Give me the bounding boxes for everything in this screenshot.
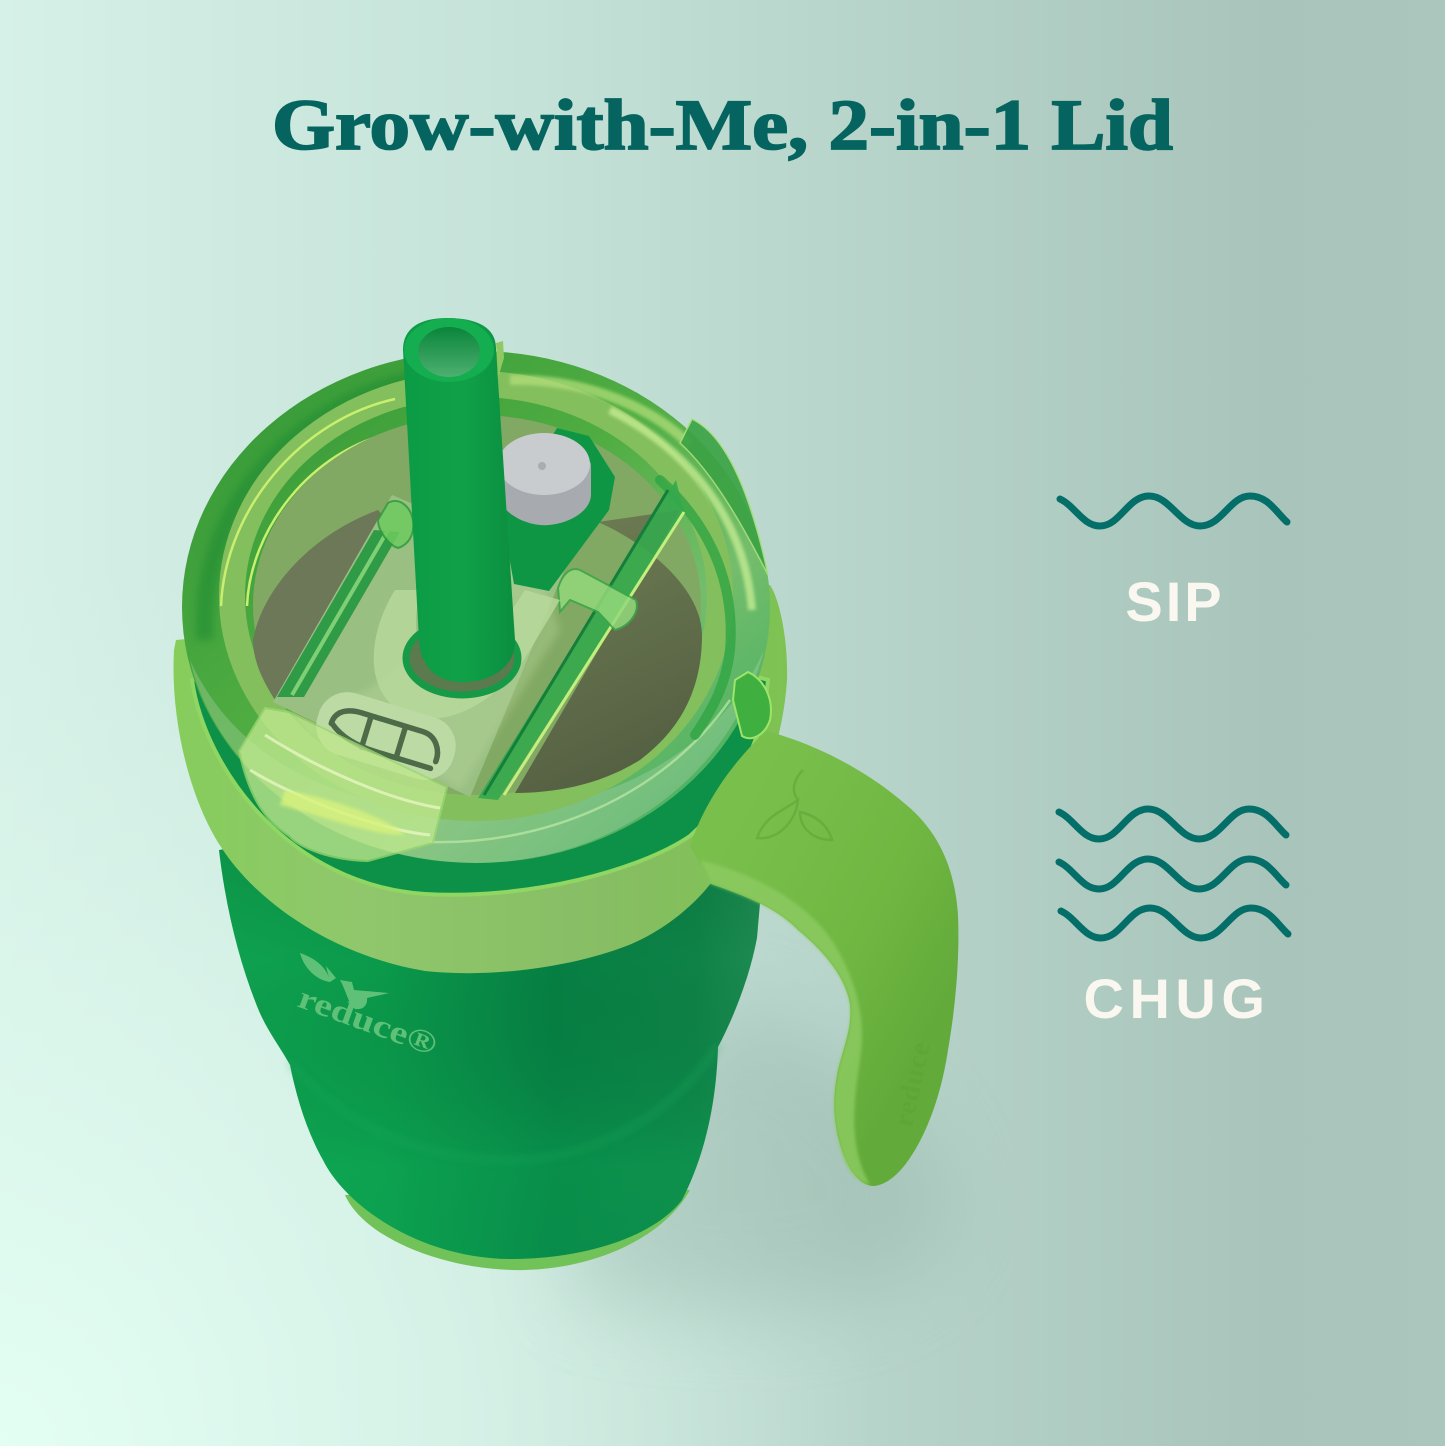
top right lid tab xyxy=(680,419,768,575)
straw base pale ring xyxy=(374,590,560,719)
lower clear rim of lid xyxy=(190,650,764,863)
right rail xyxy=(478,480,684,800)
straw xyxy=(403,318,515,682)
slider highlight xyxy=(330,560,560,790)
vent openings xyxy=(327,705,443,769)
lower rim bright line xyxy=(430,700,730,842)
logo leaves xyxy=(300,953,336,982)
sip: single wave icon xyxy=(1060,496,1287,526)
flip tab inner highlight xyxy=(250,735,440,835)
chug: triple wave icon xyxy=(1059,809,1288,938)
brand logo xyxy=(294,953,442,1062)
straw rim highlight xyxy=(404,318,494,382)
straw hole xyxy=(418,327,480,377)
right rail dark line xyxy=(484,490,668,795)
gray stopper side xyxy=(498,450,591,525)
tumbler base ring xyxy=(345,1190,690,1270)
left window xyxy=(253,510,392,700)
vent badge xyxy=(309,685,463,787)
sip label: SIP xyxy=(1125,570,1225,633)
lid inner disc xyxy=(253,415,701,795)
right side clip xyxy=(733,672,771,738)
top rim lime streak xyxy=(510,380,690,445)
vent badge base xyxy=(309,685,463,787)
handle inner lit edge xyxy=(700,860,870,1185)
right rail lime line xyxy=(504,512,684,795)
pale inner ring xyxy=(232,384,720,808)
body shading xyxy=(219,800,762,1259)
right green ring xyxy=(660,480,731,735)
gray stopper top xyxy=(498,433,590,495)
outer lime line xyxy=(221,399,395,606)
lid outer xyxy=(182,351,770,863)
left rail knob xyxy=(378,501,413,548)
stopper nib xyxy=(538,462,546,470)
handle xyxy=(690,731,958,1186)
chug label: CHUG xyxy=(1084,967,1270,1030)
reduce wordmark: reduce® xyxy=(294,979,442,1062)
left rail xyxy=(277,530,400,697)
flip tab xyxy=(239,708,447,861)
straw base green ring xyxy=(406,621,518,695)
right window xyxy=(515,510,702,793)
straw notch xyxy=(496,341,504,378)
handle leaf emboss xyxy=(757,770,832,840)
slider clear panel xyxy=(273,495,565,797)
flip tab shine xyxy=(280,790,405,835)
inner lime line xyxy=(247,432,395,606)
dark green collar xyxy=(192,600,768,895)
silicone band xyxy=(173,585,787,973)
left rail highlight xyxy=(292,530,388,695)
handle reduce emboss: reduce xyxy=(889,1039,937,1129)
heading: Grow-with-Me, 2-in-1 Lid xyxy=(272,85,1173,165)
dark upper-left ring xyxy=(205,372,480,640)
right slider knob xyxy=(558,569,637,630)
product: green tumbler with lid and straw xyxy=(173,318,958,1311)
body waist crease xyxy=(290,1045,718,1160)
tumbler body xyxy=(219,800,762,1259)
ground shadow xyxy=(560,1000,951,1311)
logo stem and beak xyxy=(340,980,389,1009)
right ring highlights xyxy=(610,410,752,610)
gray stopper mount xyxy=(502,428,615,591)
